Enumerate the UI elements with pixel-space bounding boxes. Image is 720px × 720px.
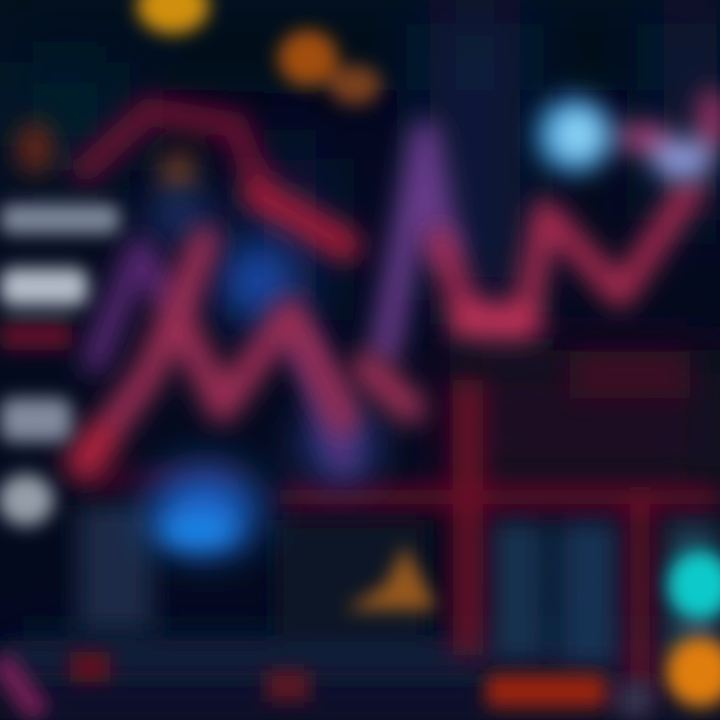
cyan and pink glow, top right xyxy=(537,88,720,180)
purple secondary line xyxy=(95,135,445,460)
blue glows xyxy=(150,195,378,552)
orange chart icon, bottom centre xyxy=(345,545,438,610)
bottom panels xyxy=(0,505,720,671)
cyan and orange circles, right edge xyxy=(666,551,720,707)
bottom red bar and marks xyxy=(0,652,652,717)
orange coins, top xyxy=(137,0,381,105)
red grid lines xyxy=(90,375,720,700)
white text blobs, left xyxy=(0,204,120,526)
bright blue blob xyxy=(158,512,238,548)
upper dark-red line xyxy=(17,110,345,245)
main zigzag trend line xyxy=(85,190,690,462)
